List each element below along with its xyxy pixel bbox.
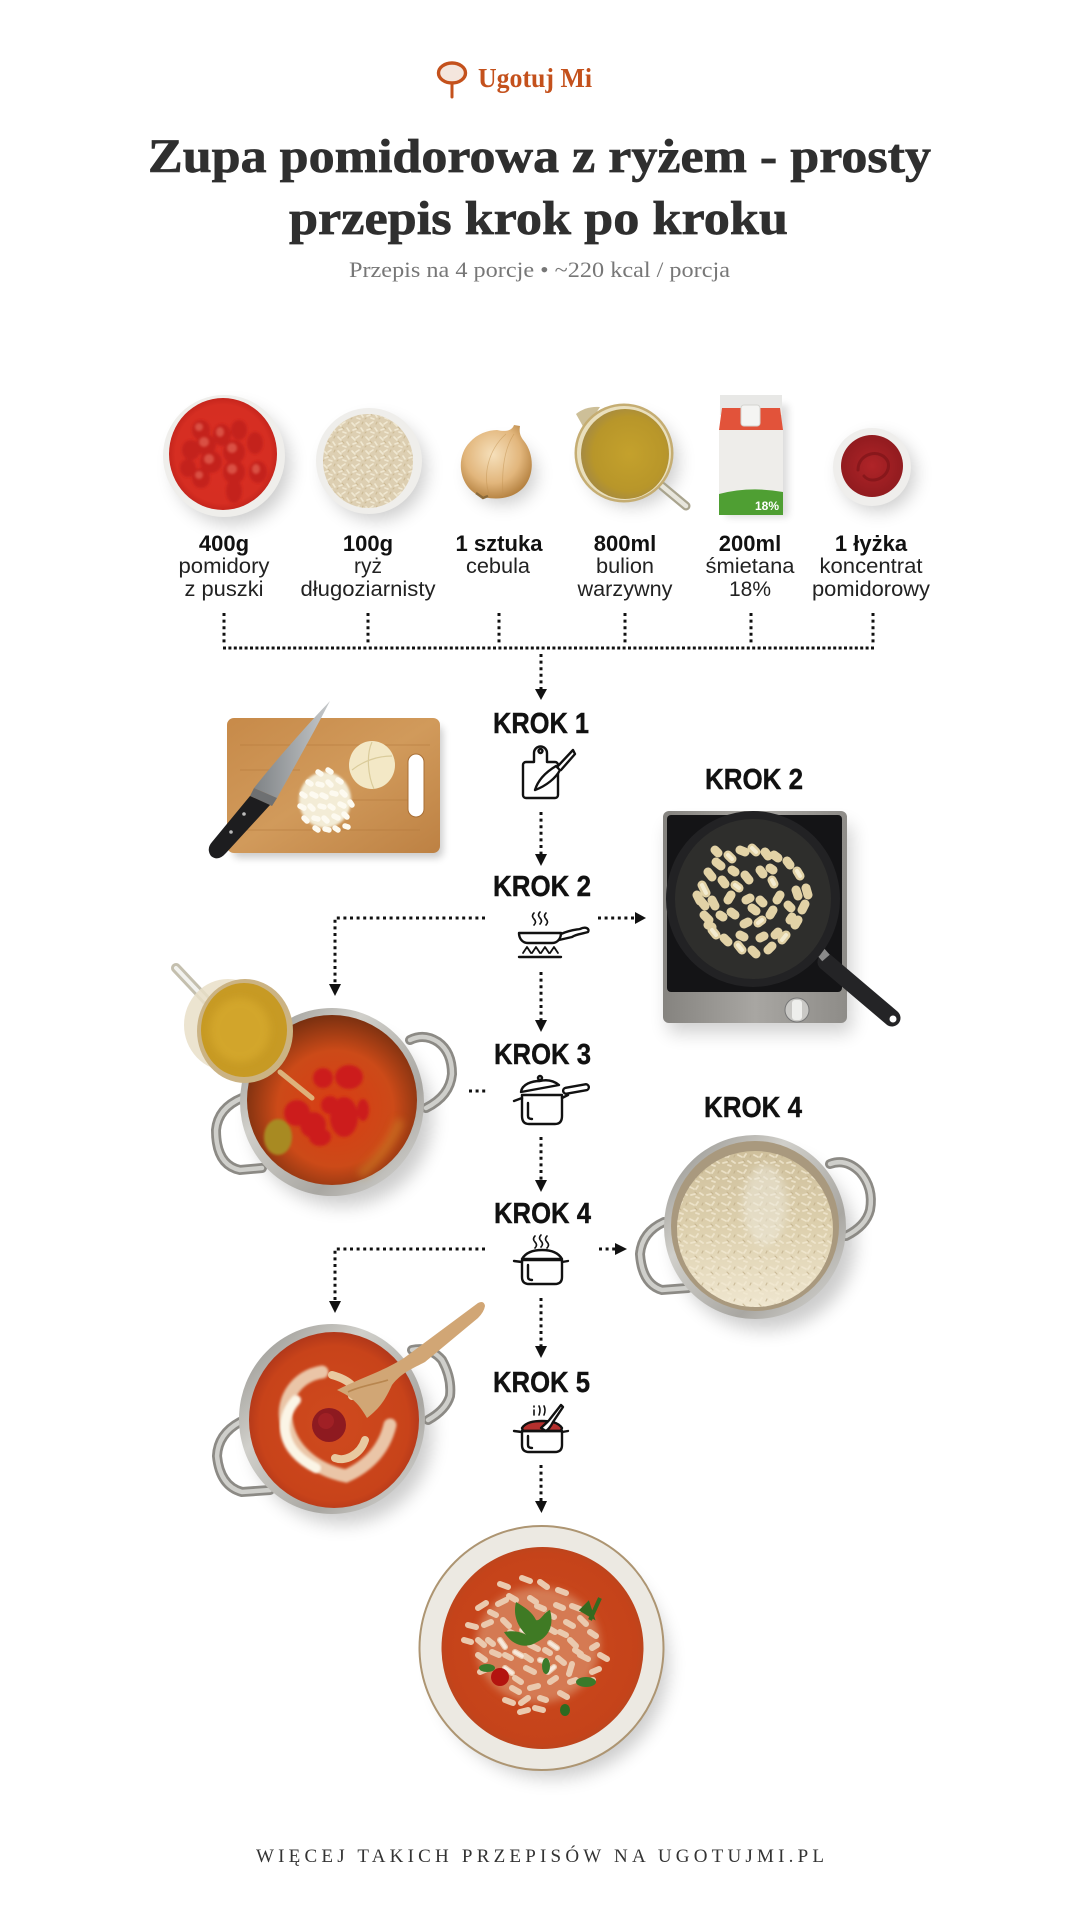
ingredient label: tomato paste	[812, 531, 931, 601]
ingredient label: onion	[456, 531, 543, 578]
ingredient label: cream	[706, 531, 795, 601]
ingredient label: tomatoes: pomidory	[178, 555, 270, 578]
step: KROK 5	[493, 1367, 590, 1452]
arrow: step 1 to 2	[535, 812, 547, 866]
heading: KROK 4: KROK 4	[494, 1198, 591, 1230]
step: KROK 3	[494, 1039, 591, 1124]
footer: WIĘCEJ TAKICH PRZEPISÓW NA UGOTUJMI.PL	[256, 1845, 824, 1867]
ingredient label: tomatoes	[178, 531, 270, 601]
heading: KROK 2: KROK 2	[493, 871, 591, 903]
ingredient label: tomato paste: koncentrat	[820, 555, 923, 578]
ingredient label: cream: 18%	[729, 578, 771, 601]
icon: covered steaming pot	[514, 1235, 568, 1284]
icon: cutting board and knife	[523, 747, 575, 798]
ingredient label: onion: cebula	[466, 555, 530, 578]
heading: KROK 1: KROK 1	[493, 708, 589, 740]
arrow: step 4 left branch	[329, 1249, 485, 1313]
icon: pan on burner	[519, 912, 589, 957]
arrow: step 2 right branch	[598, 912, 646, 924]
arrow: ingredients bracket	[223, 613, 874, 700]
step: KROK 2	[493, 871, 591, 957]
ingredient label: rice	[300, 531, 436, 601]
step: KROK 4	[494, 1198, 591, 1284]
ingredient label: rice: ryż	[354, 555, 382, 578]
heading: KROK 2 right: KROK 2	[705, 764, 803, 796]
arrow: short dots towards pot	[469, 1090, 486, 1092]
image: broth measuring jug	[574, 404, 686, 506]
ingredient label: tomato paste: 1 łyżka	[835, 531, 908, 556]
icon: spoon pin	[438, 63, 466, 97]
ingredient label: cream: 200ml	[719, 531, 781, 556]
logo	[438, 63, 592, 97]
ingredient label: broth: warzywny	[576, 578, 673, 601]
ingredient label: cream: śmietana	[706, 555, 795, 578]
image: onions frying on hob	[663, 811, 896, 1033]
arrow: step 5 to bowl	[535, 1465, 547, 1513]
brand name: Ugotuj Mi	[478, 63, 592, 93]
ingredient label: tomato paste: pomidorowy	[812, 578, 931, 601]
ingredient label: broth: 800ml	[594, 531, 656, 556]
ingredient label: onion: 1 sztuka	[456, 531, 543, 556]
carton percent label: 18%	[755, 499, 779, 513]
arrow: step 2 left branch	[329, 918, 485, 996]
arrow: step 2 to 3	[535, 972, 547, 1032]
arrow: step 3 to 4	[535, 1137, 547, 1192]
image: broth poured into pot	[176, 968, 452, 1206]
ingredient label: tomatoes: z puszki	[184, 578, 264, 601]
image: finished tomato soup with rice	[420, 1526, 668, 1778]
ingredient label: broth: bulion	[596, 555, 654, 578]
image: soup with cream and wooden spoon	[217, 1302, 485, 1524]
image: cutting board with onion and knife	[209, 701, 443, 858]
arrow: step 4 right branch	[599, 1243, 627, 1255]
ingredient label: broth	[576, 531, 673, 601]
image: rice bowl	[316, 408, 426, 520]
ingredient label: rice: długoziarnisty	[300, 578, 436, 601]
icon: pot with soup and spoon	[514, 1405, 568, 1452]
ingredient label: rice: 100g	[343, 531, 393, 556]
title: przepis krok po kroku	[289, 192, 788, 245]
image: rice cooking in pot	[640, 1135, 871, 1330]
subtitle: Przepis na 4 porcje • ~220 kcal / porcja	[349, 257, 730, 282]
icon: pot with tilted lid	[514, 1076, 589, 1124]
heading: KROK 4 right: KROK 4	[704, 1092, 802, 1124]
image: canned tomatoes bowl	[163, 395, 290, 524]
title: Zupa pomidorowa z ryżem - prosty	[148, 130, 931, 183]
ingredient label: tomatoes: 400g	[199, 531, 249, 556]
title	[148, 130, 931, 245]
image: onion	[461, 425, 536, 504]
image: tomato paste ramekin	[833, 428, 915, 511]
heading: KROK 3: KROK 3	[494, 1039, 591, 1071]
image: cream carton	[719, 395, 788, 517]
arrow: step 4 to 5	[535, 1298, 547, 1358]
heading: KROK 5: KROK 5	[493, 1367, 590, 1399]
step: KROK 1	[493, 708, 589, 798]
panel: ingredients	[163, 395, 931, 601]
